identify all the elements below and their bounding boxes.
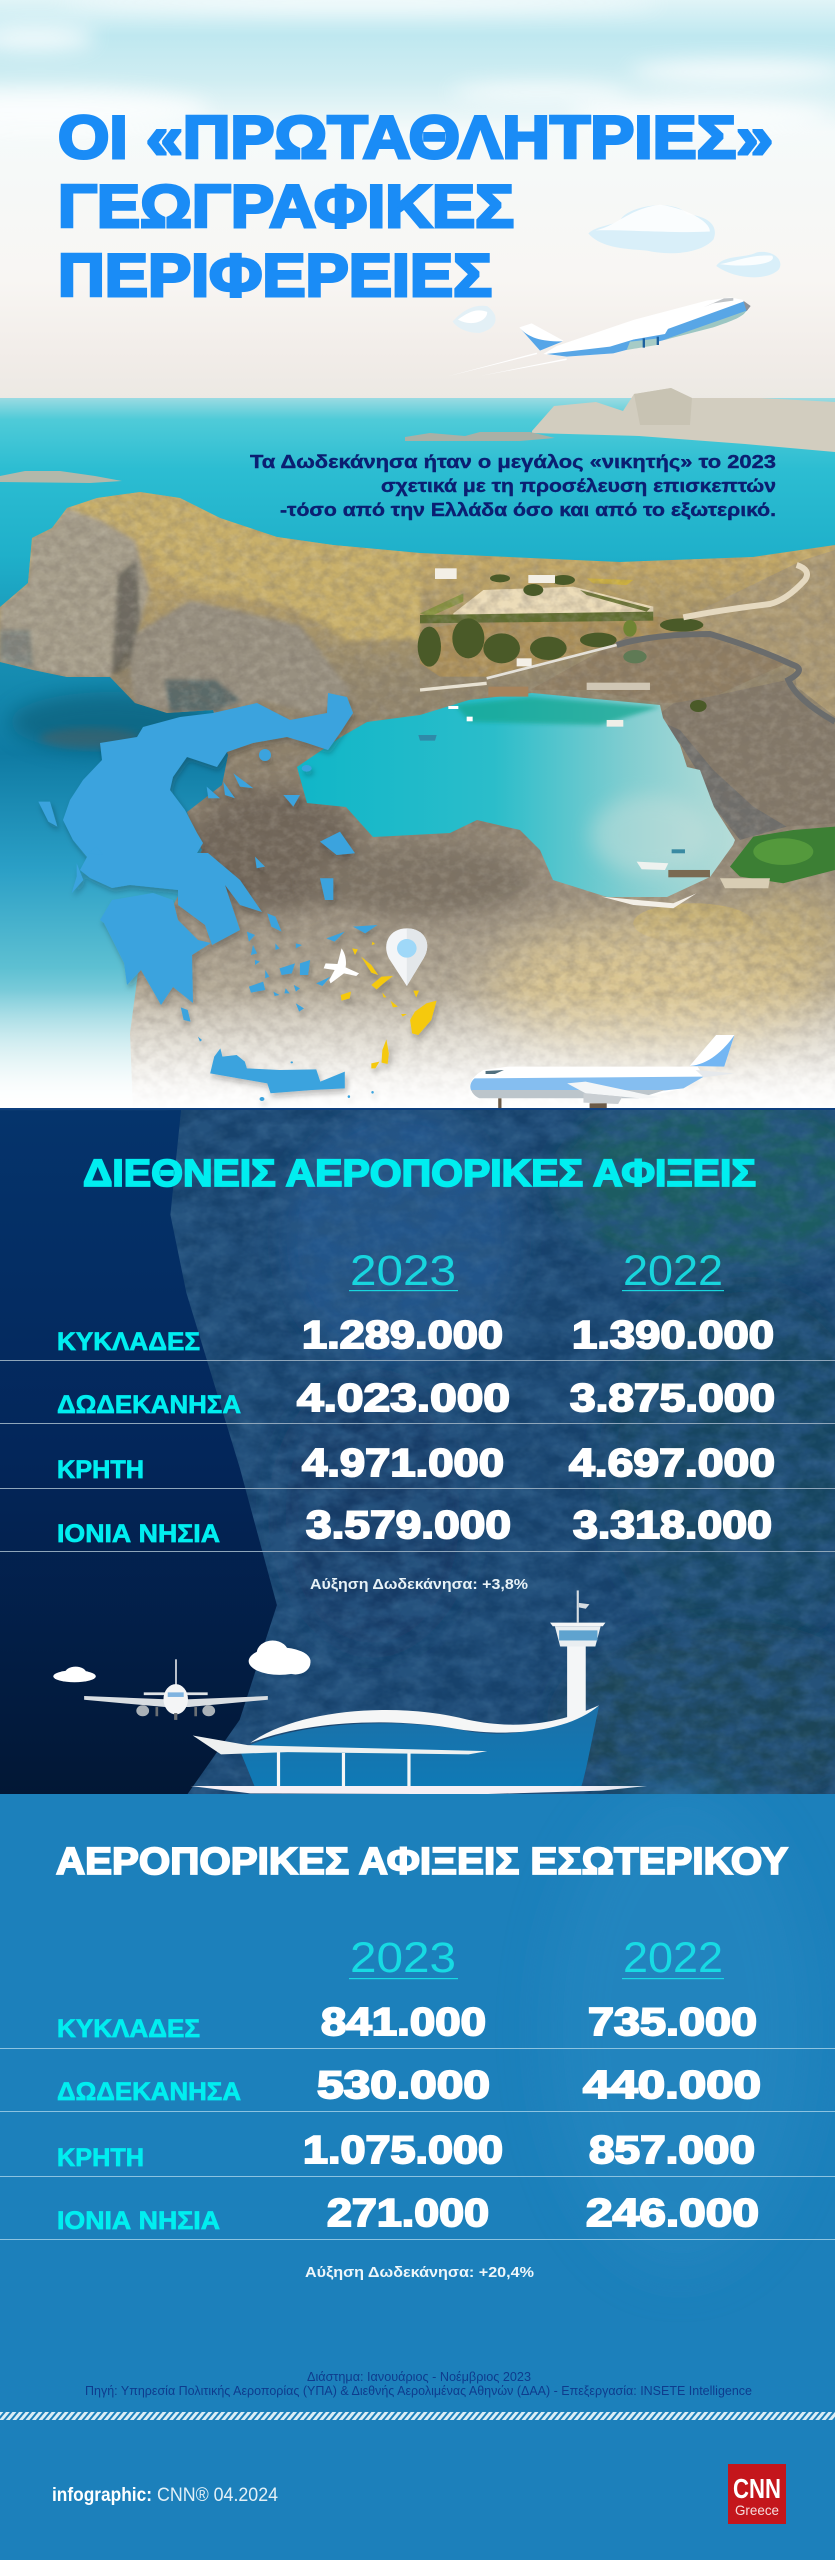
heading: ΑΕΡΟΠΟΡΙΚΕΣ ΑΦΙΞΕΙΣ ΕΣΩΤΕΡΙΚΟΥ bbox=[56, 1841, 788, 1883]
intro text bbox=[250, 452, 776, 521]
road bbox=[420, 565, 835, 722]
year headers: 2022 bbox=[623, 1247, 723, 1295]
dark sea bbox=[0, 1110, 277, 1796]
region labels: ΚΥΚΛΑΔΕΣ bbox=[57, 2015, 200, 2043]
year headers: 2023 bbox=[350, 1934, 456, 1982]
region labels bbox=[57, 2015, 241, 2235]
region labels bbox=[57, 1328, 241, 1548]
footer credit bbox=[52, 2485, 278, 2506]
distant headland bbox=[405, 388, 835, 452]
islet bbox=[0, 471, 122, 483]
heading: ΔΙΕΘΝΕΙΣ ΑΕΡΟΠΟΡΙΚΕΣ ΑΦΙΞΕΙΣ bbox=[83, 1153, 756, 1195]
year headers bbox=[349, 1934, 724, 1982]
cliff photo background bbox=[0, 1091, 835, 1812]
region labels: ΙΟΝΙΑ ΝΗΣΙΑ bbox=[57, 2207, 220, 2235]
values bbox=[297, 1314, 775, 1547]
source text: Πηγή: Υπηρεσία Πολιτικής Αεροπορίας (ΥΠΑ) & Διεθνής Αερολιμένας Αθηνών (ΔΑΑ) - Επεξεργασία: INSETE Intelligence bbox=[85, 2383, 752, 2398]
Dodecanese in yellow bbox=[341, 942, 437, 1068]
region labels: ΚΡΗΤΗ bbox=[57, 1456, 144, 1484]
note: Αύξηση Δωδεκάνησα: +20,4% bbox=[305, 2264, 534, 2281]
region labels: ΚΥΚΛΑΔΕΣ bbox=[57, 1328, 200, 1356]
clouds bbox=[453, 205, 780, 333]
values: 4.971.000 bbox=[302, 1442, 504, 1485]
rock face bbox=[0, 508, 150, 677]
values: 440.000 bbox=[583, 2064, 761, 2107]
values: 841.000 bbox=[321, 2001, 486, 2044]
intro text: Τα Δωδεκάνησα ήταν ο μεγάλος «νικητής» το 2023 bbox=[250, 452, 776, 472]
note: Αύξηση Δωδεκάνησα: +3,8% bbox=[310, 1576, 528, 1593]
map of Greece bbox=[38, 693, 437, 1101]
title bbox=[58, 104, 773, 309]
values: 857.000 bbox=[589, 2129, 755, 2172]
sky background bbox=[0, 0, 835, 400]
fade to white bbox=[0, 990, 835, 1110]
footer credit: CNN® 04.2024 bbox=[157, 2485, 278, 2506]
airplane taking off bbox=[447, 297, 751, 377]
panel: hero photo bbox=[0, 0, 835, 1110]
central rock bbox=[190, 790, 360, 910]
region labels: ΔΩΔΕΚΑΝΗΣΑ bbox=[57, 2078, 241, 2106]
icon: clouds bbox=[53, 1640, 310, 1682]
icon: map pin bbox=[386, 928, 427, 986]
table: international bbox=[0, 1247, 835, 1552]
title: ΓΕΩΓΡΑΦΙΚΕΣ bbox=[58, 173, 514, 240]
values: 735.000 bbox=[588, 2001, 757, 2044]
Crete bbox=[210, 1048, 345, 1093]
Peloponnese bbox=[100, 893, 211, 1005]
section divider line bbox=[0, 1108, 835, 1111]
region labels: ΙΟΝΙΑ ΝΗΣΙΑ bbox=[57, 1520, 220, 1548]
values: 1.289.000 bbox=[302, 1314, 503, 1357]
icon: white plane bbox=[324, 948, 359, 983]
source text: Διάστημα: Ιανουάριος - Νοέμβριος 2023 bbox=[307, 2369, 531, 2384]
icon: plane front view bbox=[84, 1659, 268, 1720]
row lines bbox=[0, 2048, 835, 2240]
values: 3.579.000 bbox=[306, 1504, 511, 1547]
buildings and beach bbox=[435, 568, 770, 908]
title: ΟΙ «ΠΡΩΤΑΘΛΗΤΡΙΕΣ» bbox=[58, 104, 773, 171]
airplane parked bbox=[470, 1035, 734, 1110]
green bush bbox=[730, 827, 835, 883]
values: 1.390.000 bbox=[572, 1314, 774, 1357]
logo: CNN Greece: Greece bbox=[735, 2502, 779, 2518]
bay water bbox=[297, 693, 735, 897]
mainland bbox=[63, 693, 353, 945]
values: 4.023.000 bbox=[297, 1377, 510, 1420]
values bbox=[303, 2001, 761, 2235]
footer credit: infographic: bbox=[52, 2485, 152, 2506]
blue islands bbox=[38, 749, 355, 900]
values: 3.875.000 bbox=[570, 1377, 775, 1420]
logo: CNN Greece: CNN bbox=[733, 2473, 781, 2504]
blue background bbox=[0, 1794, 835, 2560]
panel: domestic arrivals bbox=[0, 1790, 835, 2560]
lower right pale slope bbox=[490, 890, 835, 1050]
row lines bbox=[0, 1360, 835, 1552]
region labels: ΚΡΗΤΗ bbox=[57, 2144, 144, 2172]
title: ΠΕΡΙΦΕΡΕΙΕΣ bbox=[58, 242, 492, 309]
boats bbox=[418, 706, 685, 870]
icon: airport terminal and tower bbox=[191, 1590, 647, 1794]
panel: international arrivals bbox=[0, 1091, 835, 1812]
values: 530.000 bbox=[317, 2064, 490, 2107]
year headers bbox=[349, 1247, 724, 1295]
intro text: -τόσο από την Ελλάδα όσο και από το εξωτερικό. bbox=[280, 500, 776, 521]
values: 246.000 bbox=[586, 2192, 759, 2235]
values: 1.075.000 bbox=[303, 2129, 503, 2172]
land mass bbox=[0, 492, 835, 1110]
sea bbox=[0, 398, 835, 1110]
region labels: ΔΩΔΕΚΑΝΗΣΑ bbox=[57, 1391, 241, 1419]
source text bbox=[85, 2369, 752, 2398]
values: 3.318.000 bbox=[573, 1504, 772, 1547]
values: 271.000 bbox=[327, 2192, 489, 2235]
logo: CNN Greece bbox=[728, 2464, 786, 2524]
trees bbox=[418, 574, 707, 712]
golden top of the cliff bbox=[67, 492, 420, 640]
values: 4.697.000 bbox=[569, 1442, 775, 1485]
table: domestic bbox=[0, 1934, 835, 2240]
year headers: 2022 bbox=[623, 1934, 723, 1982]
dark water below cliff bbox=[10, 692, 210, 752]
intro text: σχετικά με τη προσέλευση επισκεπτών bbox=[381, 476, 776, 496]
right slopes bbox=[420, 550, 835, 943]
year headers: 2023 bbox=[350, 1247, 456, 1295]
